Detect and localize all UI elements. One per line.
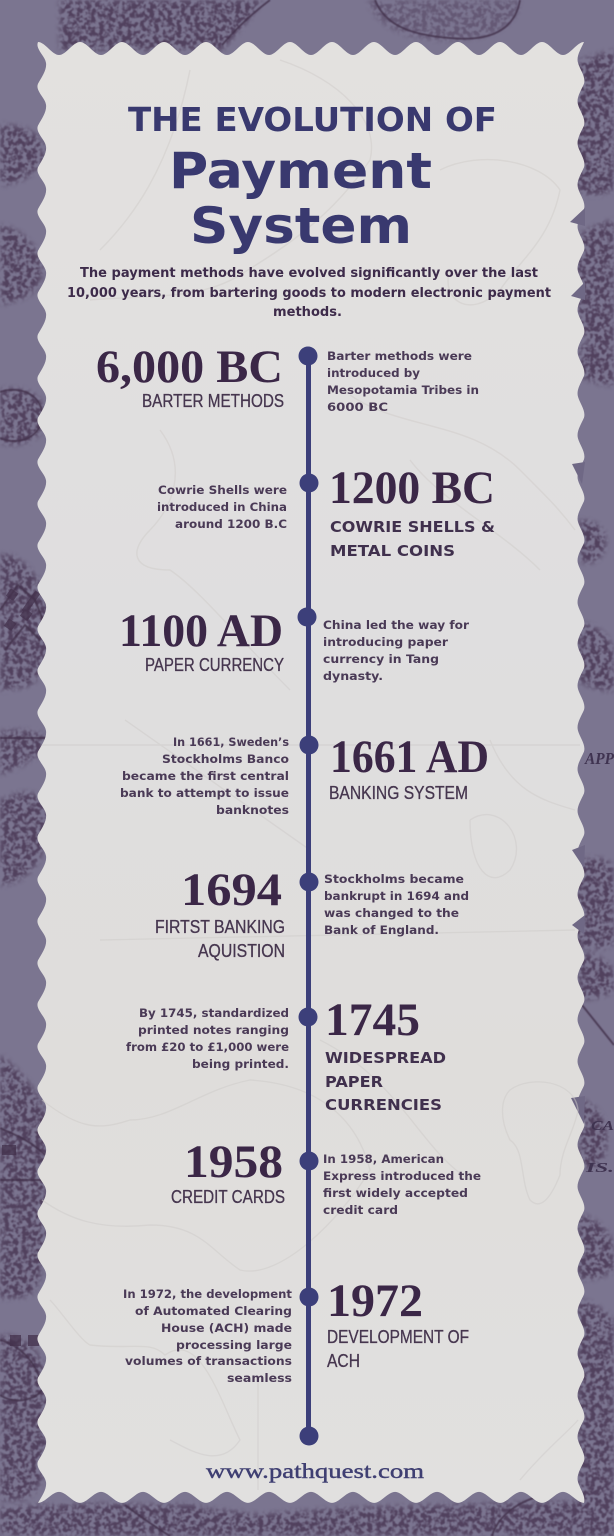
timeline entry: 1200 BC: around 1200 B.C [175,517,287,531]
timeline entry: 1958: credit card [323,1203,398,1217]
timeline entry: 1694: was changed to the [324,906,459,920]
timeline entry: 1972: of Automated Clearing [135,1304,292,1318]
timeline entry: 1200 BC [157,462,495,560]
timeline entry: 1745: from £20 to £1,000 were [126,1040,289,1054]
intro text: methods. [273,304,342,320]
timeline entry: 1972: processing large [176,1338,292,1352]
timeline entry: 1745: 1745 [325,994,420,1046]
timeline entry: 1694: 1694 [181,864,282,916]
intro text: The payment methods have evolved significantly over the last [80,265,539,281]
timeline entry: 6,000 BC: Mesopotamia Tribes in [327,383,479,397]
timeline entry: 1100 AD: currency in Tang [323,652,439,666]
timeline entry: 1972: volumes of transactions [125,1354,292,1368]
timeline entry: 1100 AD: China led the way for [323,618,469,632]
timeline entry: 1100 AD: introducing paper [323,635,448,649]
timeline entry: 1661 AD: BANKING SYSTEM [329,783,468,803]
timeline entry: 6,000 BC [96,341,479,414]
timeline entry: 1972: House (ACH) made [161,1321,292,1335]
timeline axis with dots [298,346,318,1446]
timeline entry: 1958: first widely accepted [323,1186,468,1200]
timeline entry: 1972 [123,1275,469,1385]
timeline entry: 1100 AD: dynasty. [323,669,383,683]
timeline entry: 1745: By 1745, standardized [139,1006,289,1020]
timeline entry: 6,000 BC: 6000 BC [327,400,388,414]
timeline entry: 1745: printed notes ranging [138,1023,289,1037]
timeline entry: 1972: 1972 [327,1275,423,1327]
timeline entry: 1200 BC: METAL COINS [330,542,455,560]
timeline entry: 1694: Bank of England. [324,923,439,937]
timeline entry: 1200 BC: 1200 BC [329,462,495,514]
timeline entry: 1694: FIRTST BANKING [155,917,285,937]
timeline entry: 1100 AD: 1100 AD [119,605,283,657]
timeline entry: 1745: PAPER [325,1073,383,1091]
intro text: 10,000 years, from bartering goods to modern electronic payment [67,285,552,301]
timeline entry: 1694: Stockholms became [324,872,464,886]
footer url: www.pathquest.com [206,1459,424,1483]
title [128,100,497,255]
timeline entry: 6,000 BC: BARTER METHODS [142,391,284,411]
timeline entry: 1661 AD [120,731,489,817]
timeline entry: 1958: CREDIT CARDS [171,1187,285,1207]
timeline entry: 1661 AD: Stockholms Banco [162,752,289,766]
timeline entry: 1661 AD: 1661 AD [330,731,489,783]
timeline entry: 1661 AD: bank to attempt to issue [120,786,289,800]
timeline entry: 1972: DEVELOPMENT OF [327,1327,469,1347]
timeline entry: 1661 AD: banknotes [216,803,289,817]
timeline entry: 1972: seamless [227,1371,292,1385]
timeline entry: 1972: In 1972, the development [123,1287,292,1301]
timeline entry: 1694 [155,864,469,961]
timeline entry: 1200 BC: COWRIE SHELLS & [330,518,495,536]
timeline entry: 1745 [126,994,446,1114]
timeline entry: 1972: ACH [327,1351,360,1371]
timeline entry: 1100 AD [119,605,469,683]
timeline entry: 1200 BC: introduced in China [157,500,287,514]
timeline entry: 1745: CURRENCIES [325,1096,442,1114]
background: antique map: CA [591,1119,614,1134]
timeline entry: 1694: bankrupt in 1694 and [324,889,469,903]
timeline entry: 1958: In 1958, American [323,1152,444,1166]
heading line: the evolution of: THE EVOLUTION OF [128,100,497,139]
timeline entry: 1694: AQUISTION [198,941,285,961]
timeline entry: 6,000 BC: Barter methods were [327,349,472,363]
heading line: payment: Payment [169,142,432,200]
heading line: system: System [190,197,412,255]
timeline entry: 1745: WIDESPREAD [325,1049,446,1067]
timeline entry: 1661 AD: In 1661, Sweden’s [173,735,289,749]
timeline entry: 1745: being printed. [192,1057,289,1071]
timeline entry: 6,000 BC: introduced by [327,366,421,380]
timeline entry: 1958: 1958 [184,1136,283,1188]
timeline entry: 6,000 BC: 6,000 BC [96,341,283,393]
timeline entry: 1200 BC: Cowrie Shells were [158,483,287,497]
timeline entry: 1958: Express introduced the [323,1169,481,1183]
timeline entry: 1100 AD: PAPER CURRENCY [145,655,284,675]
timeline entry: 1661 AD: became the first central [122,769,289,783]
timeline entry: 1958 [171,1136,481,1217]
background: antique map: IS. [584,1161,614,1176]
intro text [67,265,552,320]
